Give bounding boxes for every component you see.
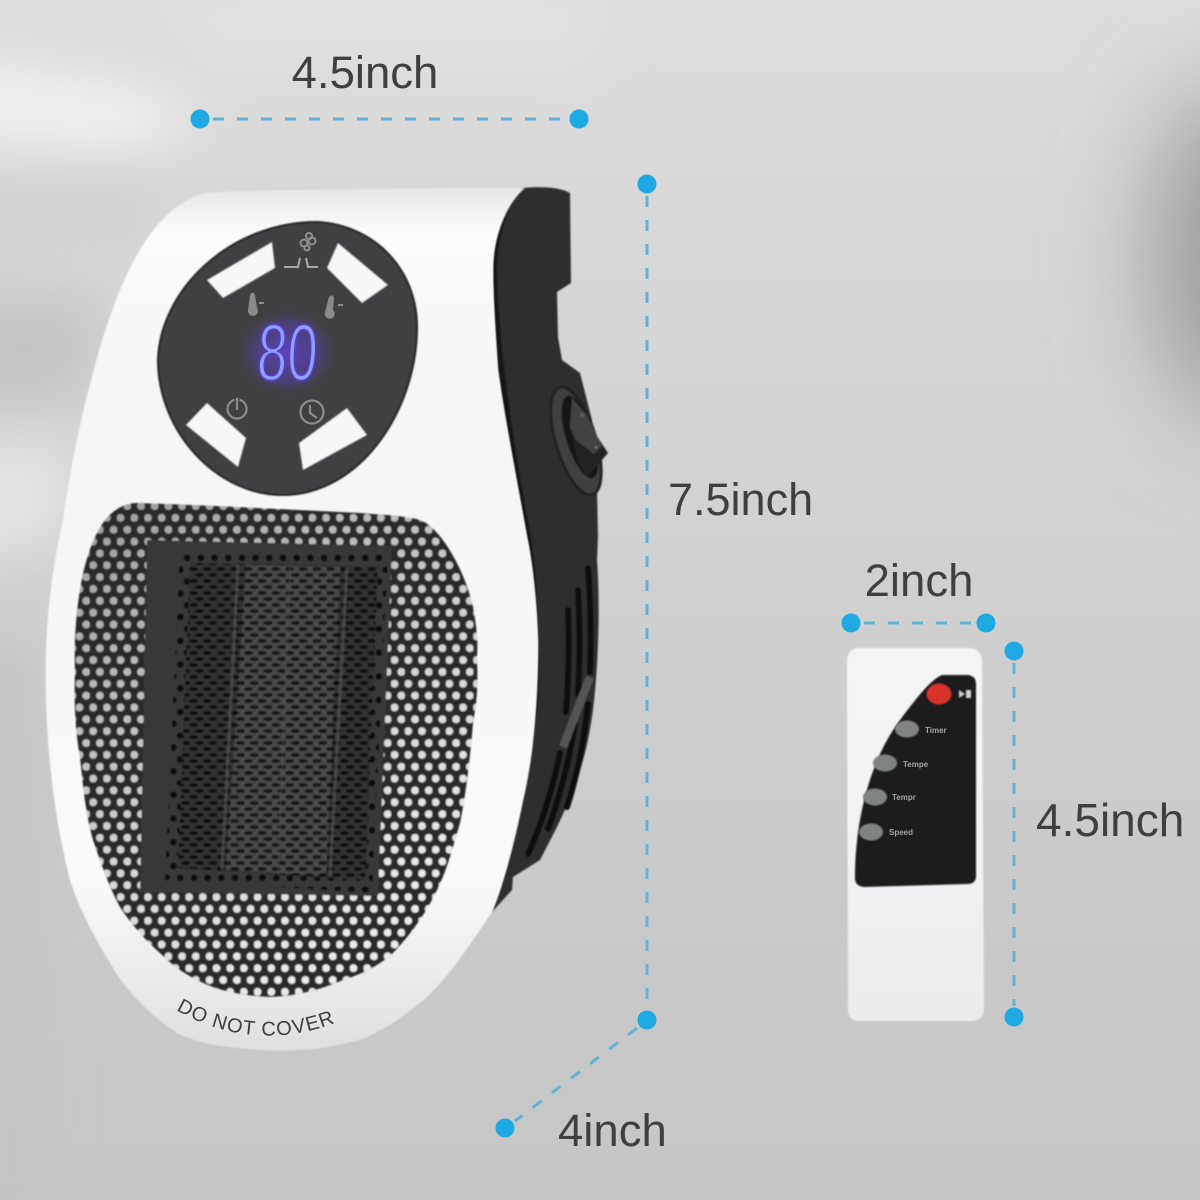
- icon: temperature up: [325, 295, 343, 319]
- heating core: [140, 540, 392, 896]
- dimension: heater height: [638, 174, 813, 1030]
- control panel: [158, 222, 417, 495]
- side vents: [528, 568, 591, 854]
- remote control: [847, 648, 984, 1021]
- remote button labels: Tempr: [892, 793, 916, 802]
- icon: clock: [300, 400, 324, 424]
- heater: [45, 186, 609, 1051]
- LED display: 80: [255, 308, 320, 397]
- dimension: heater width: 4.5inch: [292, 47, 438, 98]
- dimension: remote width: 2inch: [865, 555, 973, 606]
- heater side housing: [492, 187, 611, 912]
- remote button labels: Timer: [925, 726, 947, 735]
- remote button labels: Tempe: [903, 760, 929, 769]
- vent bridge: [563, 677, 590, 747]
- rocker switch: [541, 382, 611, 500]
- remote button labels: [889, 726, 947, 837]
- dimension: heater depth: [496, 1028, 667, 1156]
- dimension: remote width: [842, 555, 996, 632]
- remote button labels: Speed: [889, 828, 913, 837]
- touch buttons: [186, 242, 388, 470]
- do not cover label: DO NOT COVER: [178, 998, 334, 1036]
- icon: temperature down: [248, 292, 264, 316]
- heater front body: [46, 188, 538, 1051]
- dimension: heater height: 7.5inch: [668, 474, 813, 525]
- dimension: heater depth: 4inch: [558, 1105, 667, 1156]
- dimension: remote height: [1004, 642, 1184, 1026]
- remote key panel: [855, 675, 976, 887]
- icon: power: [228, 398, 246, 418]
- dimension: remote height: 4.5inch: [1036, 794, 1184, 846]
- icon: fan: [284, 233, 318, 267]
- remote body: [847, 648, 984, 1021]
- heater grille: [75, 503, 477, 997]
- power button: [926, 684, 971, 704]
- remote buttons: [859, 720, 919, 840]
- dimension: heater width: [190, 47, 588, 128]
